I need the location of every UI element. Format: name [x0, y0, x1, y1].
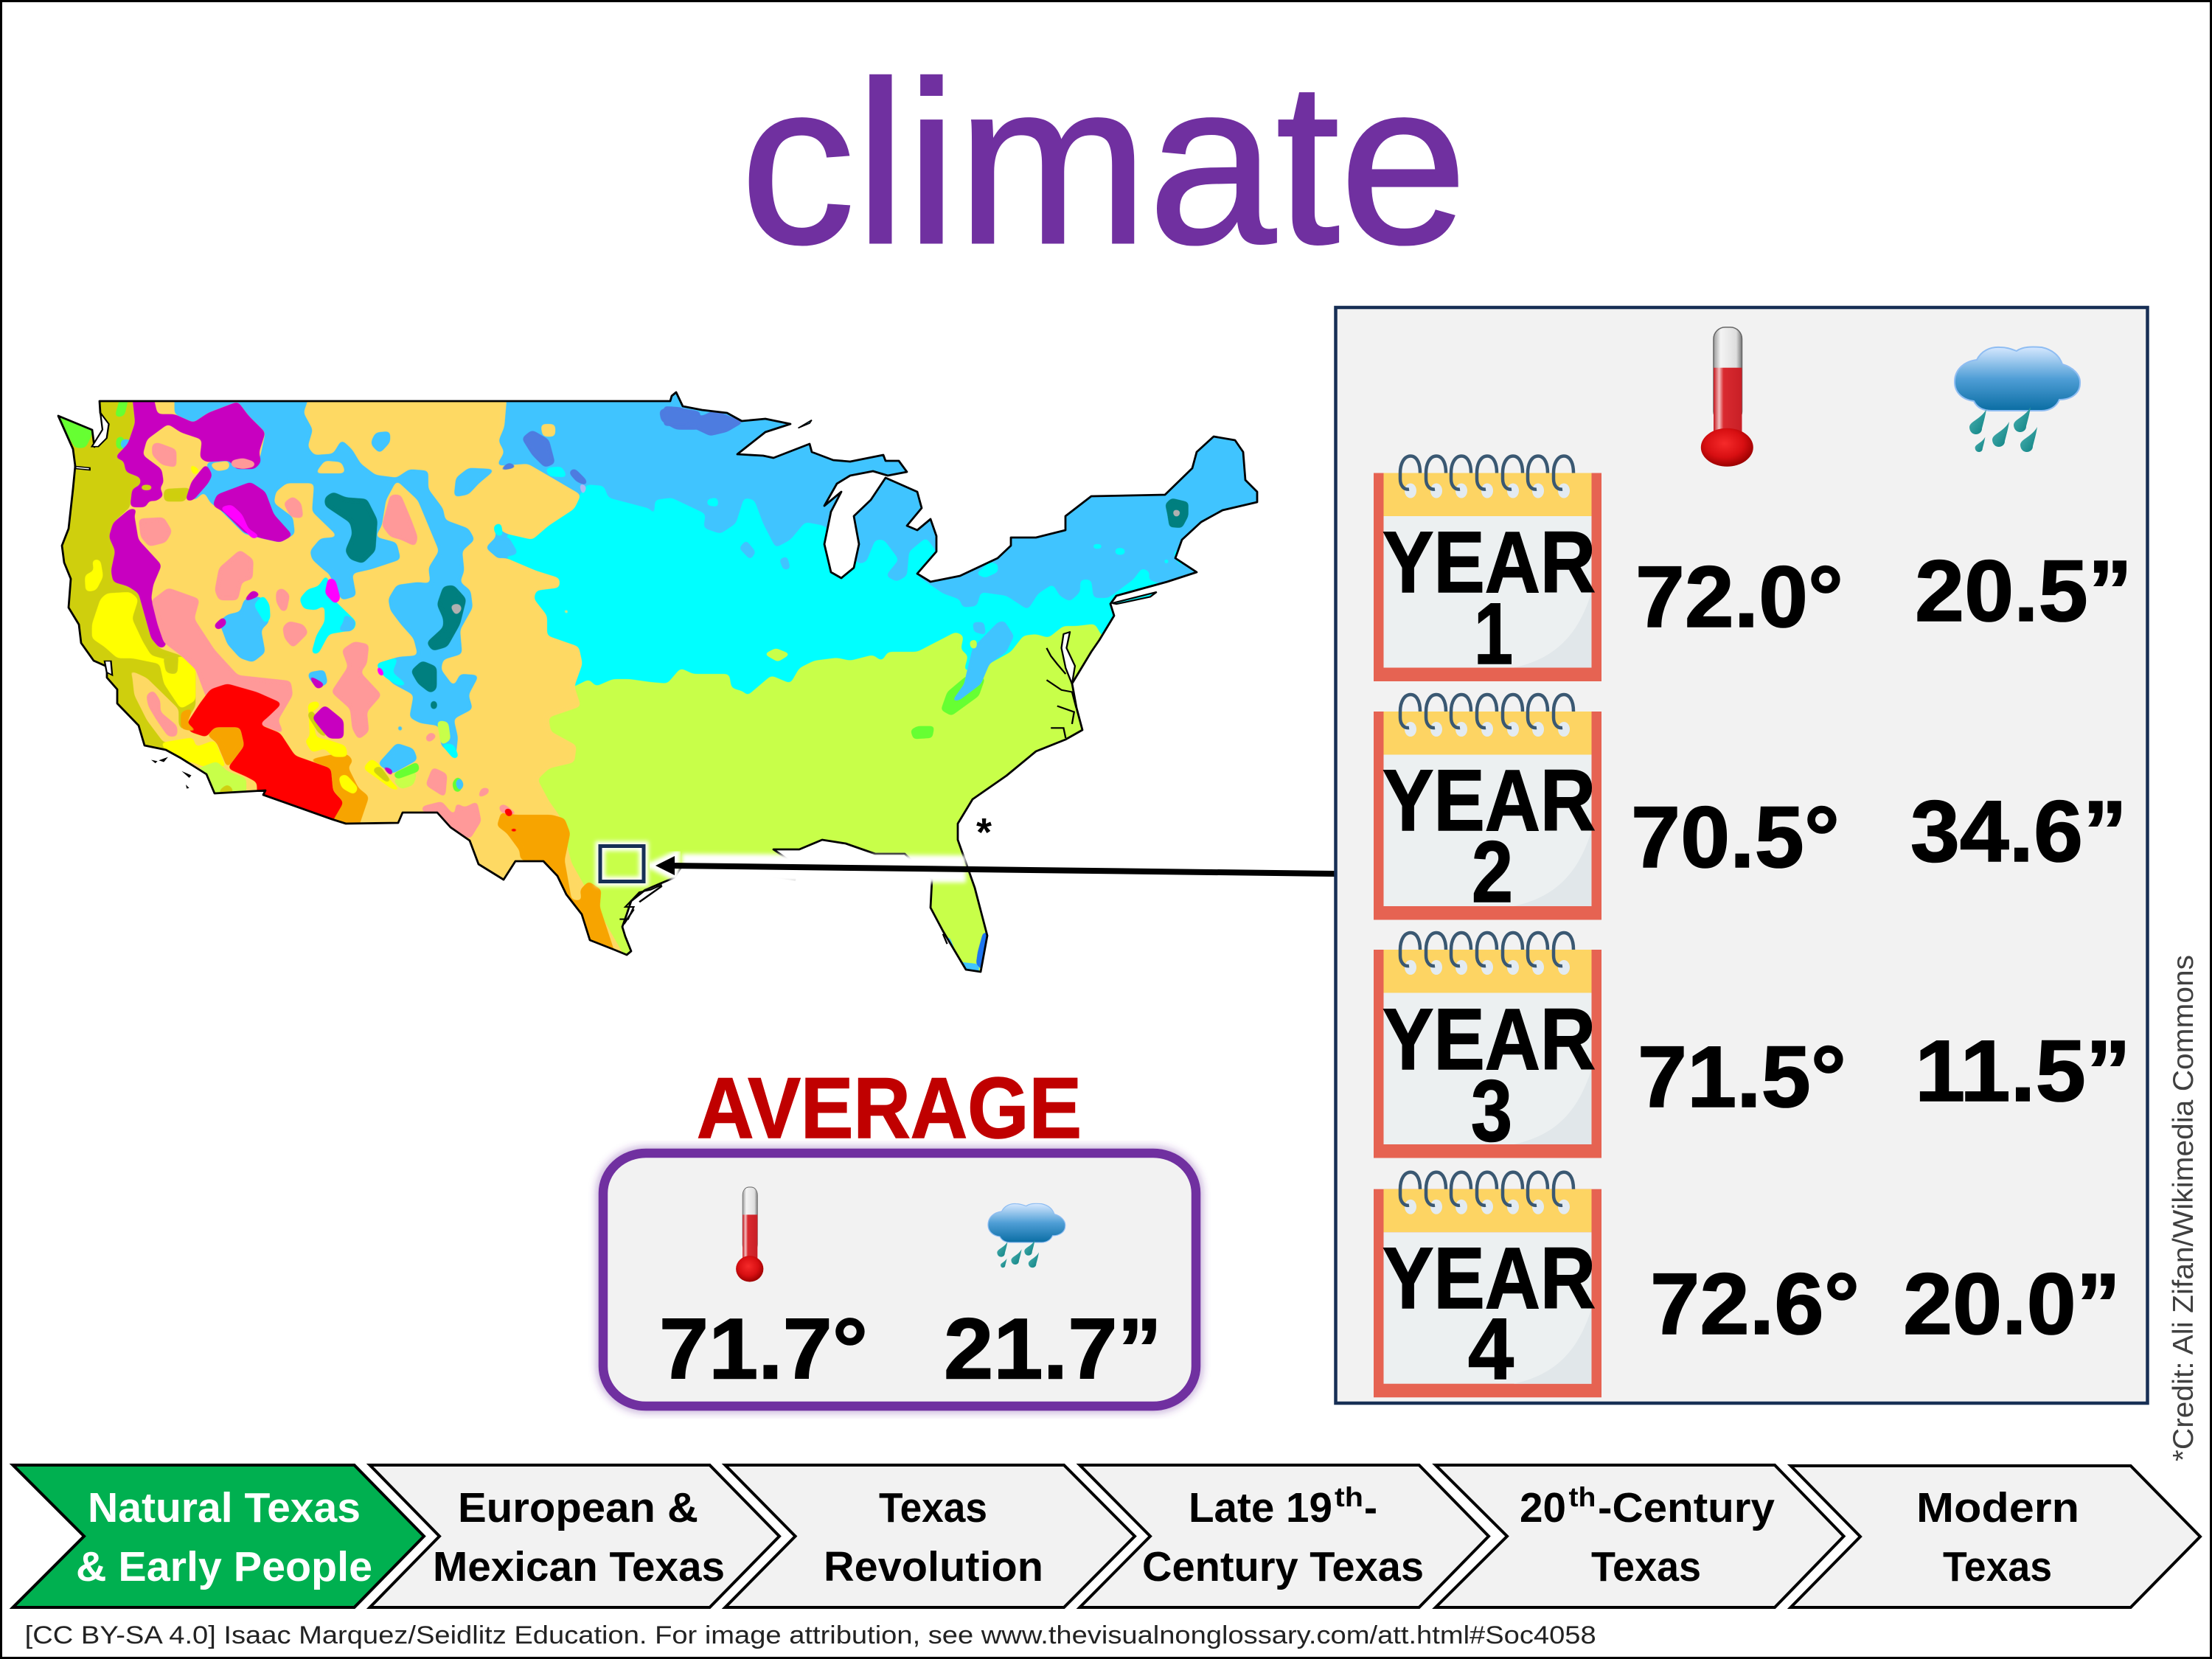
chevron: Late 19th-Century Texas: - [1364, 1484, 1377, 1531]
coast outline [58, 392, 1257, 972]
chevron: Texas Revolution [726, 1465, 1135, 1607]
chevron: European & Mexican Texas [370, 1465, 779, 1607]
icon: small thermometer [736, 1187, 763, 1282]
average temperature: 71.7° [659, 1301, 868, 1397]
south texas zones [422, 787, 617, 959]
chevron: Natural Texas & Early People [13, 1465, 424, 1607]
year 4 row: YEAR [1382, 1230, 1596, 1327]
location box on Texas [600, 846, 644, 882]
chevron: 20th-Century Texas [1436, 1465, 1844, 1607]
panel: average values [603, 1153, 1196, 1406]
chevron: Natural Texas & Early People: Natural Texas [88, 1484, 361, 1531]
chevron: Modern Texas [1791, 1466, 2200, 1607]
chevron: 20th-Century Texas: Texas [1591, 1543, 1701, 1590]
chevron: Natural Texas & Early People: & Early People [76, 1543, 372, 1590]
year 4 row: 20.0” [1903, 1256, 2121, 1353]
year 1 row: YEAR [1382, 514, 1596, 611]
panel: yearly data [1336, 307, 2147, 1403]
attribution footer: [CC BY-SA 4.0] Isaac Marquez/Seidlitz Education. For image attribution, see www.thevisualnonglossary.com/att.html#Soc4058 [25, 1621, 1596, 1649]
year 1 row [1374, 456, 2132, 683]
magenta zones [114, 396, 265, 507]
year 2 row: 34.6” [1910, 783, 2127, 880]
year 3 row [1374, 933, 2131, 1160]
west zones [45, 396, 700, 827]
year 3 row: YEAR [1382, 991, 1596, 1088]
arrow: from data panel to Texas location [655, 854, 1335, 883]
chevron: Modern Texas: Texas [1943, 1543, 2052, 1590]
map: US climate zones [58, 391, 1258, 973]
chevron: Late 19th-Century Texas [1079, 1465, 1489, 1607]
title: climate [740, 35, 1467, 292]
chevron: 20th-Century Texas: 20 [1520, 1484, 1566, 1531]
navigation chevrons [13, 1465, 2200, 1607]
average rainfall: 21.7” [944, 1301, 1162, 1397]
icon: thermometer [1701, 327, 1753, 467]
chevron: Late 19th-Century Texas: Late 19 [1189, 1484, 1332, 1531]
year 4 row [1374, 1172, 2121, 1398]
year 1 row: 1 [1474, 585, 1513, 683]
chevron: Late 19th-Century Texas: th [1335, 1482, 1363, 1512]
chevron: Texas Revolution: Revolution [824, 1543, 1043, 1590]
olive pacific zone [63, 402, 196, 749]
credit text: *Credit: Ali Zifan/Wikimedia Commons [2168, 955, 2199, 1461]
year 2 row: YEAR [1382, 752, 1596, 849]
asterisk: * [976, 810, 992, 855]
icon: rain cloud [1955, 347, 2080, 452]
year 2 row [1374, 695, 2127, 921]
year 3 row: 71.5° [1638, 1029, 1846, 1126]
year 4 row: 72.6° [1650, 1256, 1860, 1353]
teal high peaks [324, 492, 378, 563]
icon: small rain cloud [988, 1203, 1065, 1267]
pink and hot zones [151, 588, 293, 734]
chevron: Late 19th-Century Texas: Century Texas [1142, 1543, 1424, 1590]
year 3 row: 3 [1471, 1062, 1512, 1160]
chevron: Texas Revolution: Texas [879, 1484, 987, 1531]
year 1 row: 20.5” [1915, 543, 2132, 640]
chevron: Modern Texas: Modern [1916, 1484, 2079, 1531]
chevron: 20th-Century Texas: -Century [1598, 1484, 1775, 1531]
year 1 row: 72.0° [1635, 549, 1843, 646]
eastern zones [664, 406, 1189, 980]
chevron: European & Mexican Texas: European & [458, 1484, 698, 1531]
chevron: 20th-Century Texas: th [1569, 1482, 1596, 1512]
chevron: European & Mexican Texas: Mexican Texas [433, 1543, 725, 1590]
year 2 row: 70.5° [1631, 789, 1840, 886]
year 3 row: 11.5” [1915, 1023, 2131, 1120]
year 4 row: 4 [1468, 1301, 1514, 1398]
coastal details [799, 420, 1157, 944]
year 2 row: 2 [1472, 824, 1513, 921]
heading: average: AVERAGE [697, 1060, 1082, 1156]
